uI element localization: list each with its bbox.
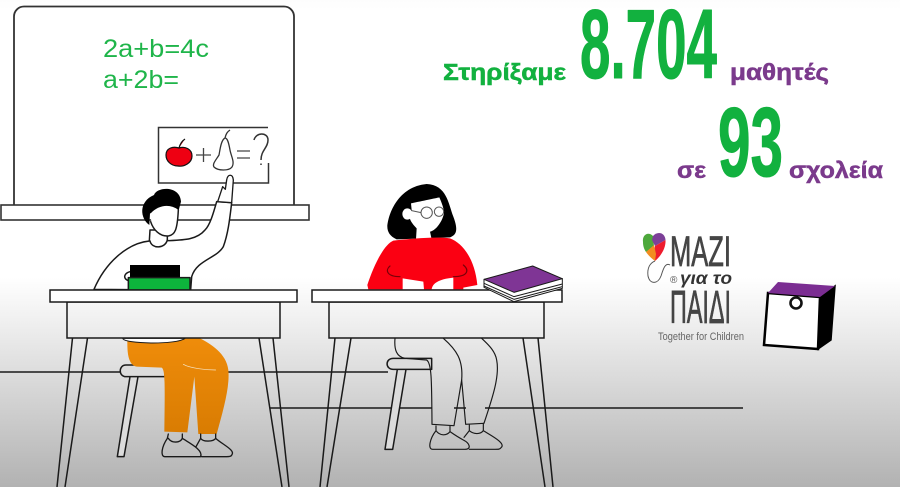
logo: Μαζί για το Παιδί (643, 228, 744, 343)
pear (213, 130, 233, 170)
black book (130, 265, 180, 278)
headline: students (443, 0, 829, 99)
orange trousers (127, 338, 229, 434)
trouser fold (183, 364, 216, 370)
registered mark: ® (670, 275, 678, 286)
label: Στηρίξαμε: Στηρίξαμε (443, 59, 566, 85)
chair (385, 358, 432, 449)
label: σε: σε (677, 157, 706, 183)
box side (818, 286, 835, 349)
desk top (312, 290, 562, 302)
torso and raised arm (94, 202, 232, 290)
shoes (430, 423, 502, 449)
question mark (254, 134, 268, 165)
equals sign (237, 151, 250, 158)
desk legs (320, 338, 553, 487)
floor lines (0, 372, 743, 408)
head (151, 206, 178, 236)
blackboard (1, 6, 309, 220)
label: σχολεία: σχολεία (789, 157, 883, 183)
face outline (151, 210, 178, 236)
board ledge (1, 205, 309, 220)
neckline (150, 240, 167, 247)
hair (387, 184, 456, 239)
big number 93: 93 (718, 87, 783, 197)
hair (142, 189, 181, 225)
wordmark ΜΑΖΙ: ΜΑΖΙ (670, 228, 731, 276)
shoes (162, 434, 232, 457)
desk legs (57, 338, 289, 487)
desk apron (67, 302, 280, 338)
purple cover (484, 266, 562, 292)
wordmark ΠΑΙΔΙ: ΠΑΙΔΙ (670, 281, 731, 333)
shirt hem (123, 338, 185, 343)
raised hand (218, 175, 233, 203)
box ring (790, 298, 802, 308)
green book (128, 278, 190, 290)
red sweater (367, 238, 477, 289)
desk left (50, 290, 297, 487)
tagline: Together for Children (658, 331, 744, 343)
sleeve folds (387, 265, 467, 277)
student raising hand (94, 175, 233, 457)
wordmark για το: για το (680, 268, 732, 288)
desk apron (329, 302, 544, 338)
trouser fold (443, 338, 462, 380)
pages (484, 279, 562, 302)
icon: box (764, 282, 835, 349)
apple (166, 139, 192, 166)
student with glasses (367, 184, 502, 449)
open book (403, 278, 453, 289)
icon: puzzle heart balloon (643, 233, 670, 282)
board frame (14, 6, 294, 216)
ear (402, 208, 412, 220)
chair (117, 365, 165, 457)
grey trousers (395, 338, 497, 426)
fruit card (158, 128, 268, 183)
desk right (312, 290, 562, 487)
equations: 2a+b=4c (103, 35, 209, 63)
label: μαθητές: μαθητές (730, 59, 829, 85)
book stack (484, 266, 562, 302)
box lid (768, 282, 835, 297)
glasses (412, 207, 444, 218)
desk top (50, 290, 297, 302)
box front (764, 293, 820, 349)
equations (103, 35, 209, 94)
headline: schools (677, 87, 883, 197)
plus sign (196, 148, 211, 162)
left hand (125, 272, 130, 281)
face (409, 197, 444, 239)
page edges (484, 283, 562, 299)
equations: a+2b= (103, 66, 179, 94)
